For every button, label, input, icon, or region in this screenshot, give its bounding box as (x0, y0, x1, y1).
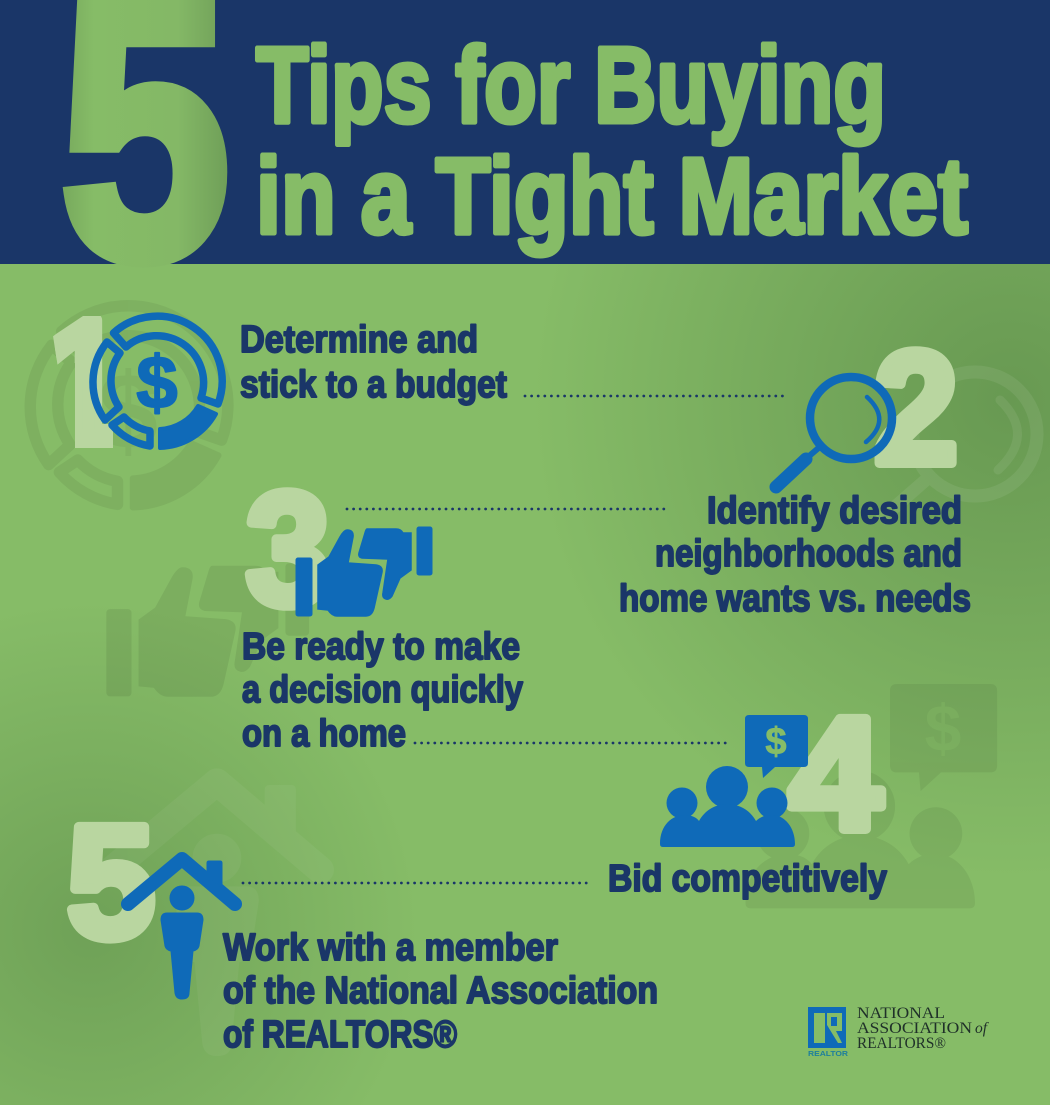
icon: budget ring with dollar (93, 316, 222, 448)
icon: budget ring with dollar: $ (136, 341, 178, 424)
connector 3 (415, 742, 728, 744)
icon: group with price bubble: $ (765, 721, 787, 763)
tip 1 text (240, 319, 507, 406)
logo: National Association of Realtors: REALTORS® (857, 1035, 946, 1052)
icon: magnifying glass (776, 377, 892, 487)
watermark: magnifier (880, 372, 1037, 520)
tip 3 text (242, 626, 523, 755)
watermark: house and realtor (112, 782, 320, 1055)
connector 4 (243, 882, 592, 884)
icon: realtor under roof (128, 859, 235, 999)
tip 5 text (223, 927, 658, 1056)
icon: thumbs up and down (296, 527, 432, 616)
logo: National Association of Realtors: REALTOR (808, 1049, 849, 1058)
numeral 5: 5 (67, 792, 155, 971)
tip 2 text: Identify desired (707, 490, 962, 532)
numeral 4: 4 (789, 684, 882, 863)
title: Tips for Buying (256, 24, 886, 145)
icon: group with price bubble (660, 715, 808, 847)
connector 1 (525, 395, 786, 397)
logo: National Association of Realtors: of (975, 1020, 990, 1037)
tip 4 text: Bid competitively (608, 858, 887, 900)
watermark: bidders (746, 684, 997, 908)
tip 1 text: Determine and (240, 319, 478, 361)
tip 3 text: on a home (242, 713, 406, 755)
numeral 3: 3 (246, 459, 330, 638)
tip 5 text: Work with a member (223, 927, 558, 969)
watermark: budget ring: $ (98, 350, 158, 471)
background panel (0, 264, 1050, 1105)
tip 1 text: stick to a budget (240, 364, 507, 406)
watermark: budget ring (30, 306, 228, 507)
watermark: thumbs (107, 564, 308, 696)
tip 5 text: of REALTORS® (223, 1014, 457, 1056)
tip 2 text: home wants vs. needs (619, 578, 971, 620)
watermark: bidders: $ (925, 691, 961, 765)
tip 2 text (619, 490, 971, 620)
connector 2 (347, 508, 668, 510)
tip 3 text: Be ready to make (242, 626, 520, 668)
tip 2 text: neighborhoods and (655, 533, 962, 575)
numeral 2: 2 (874, 318, 958, 497)
logo: National Association of Realtors: ASSOCIATION (857, 1020, 972, 1037)
tip 5 text: of the National Association (223, 970, 658, 1012)
logo: National Association of Realtors (808, 1005, 990, 1058)
title (256, 24, 968, 256)
numeral 1: 1 (45, 281, 125, 488)
tip 3 text: a decision quickly (242, 669, 523, 711)
header band (0, 0, 1050, 264)
logo: National Association of Realtors: NATIONAL (857, 1005, 945, 1022)
